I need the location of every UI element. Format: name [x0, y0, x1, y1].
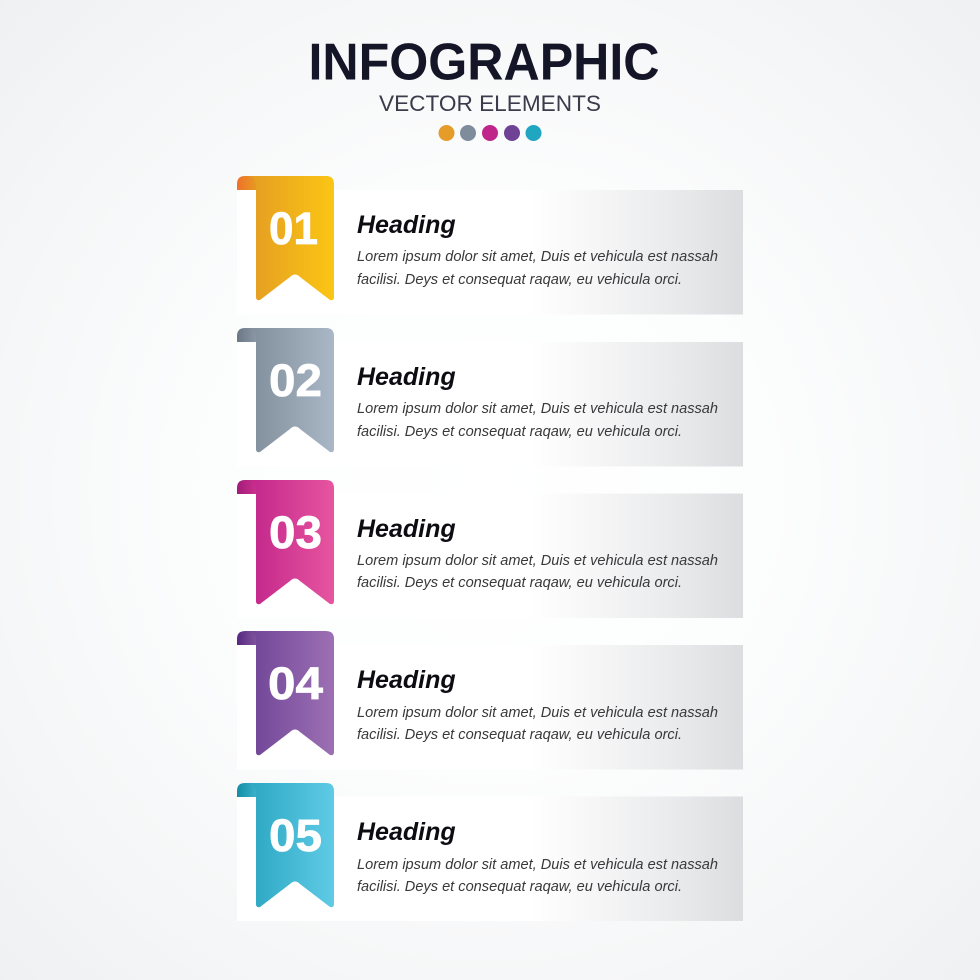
card background [237, 494, 743, 618]
body text: Lorem ipsum dolor sit amet, Duis et vehicula est nassah [357, 553, 718, 569]
subtitle: VECTOR ELEMENTS [379, 91, 601, 116]
body text: Lorem ipsum dolor sit amet, Duis et vehicula est nassah [357, 857, 718, 873]
title: INFOGRAPHIC [308, 34, 660, 92]
ribbon fold [237, 631, 256, 645]
body text: Lorem ipsum dolor sit amet, Duis et vehicula est nassah [357, 705, 718, 721]
ribbon [248, 480, 334, 604]
body text: Lorem ipsum dolor sit amet, Duis et vehicula est nassah [357, 401, 718, 417]
panel: step 03 [237, 480, 743, 618]
ribbon [248, 631, 334, 755]
ribbon [248, 328, 334, 452]
body text line 2: facilisi. Deys et consequat raqaw, eu vehicula orci. [357, 879, 682, 895]
panel: step 04 [237, 631, 743, 770]
heading: Heading [357, 515, 456, 543]
card background [237, 342, 743, 466]
ribbon fold [237, 783, 256, 797]
panel: step 01 [237, 176, 743, 314]
number: 05 [269, 810, 322, 861]
card background [237, 796, 743, 921]
number: 04 [268, 658, 323, 709]
ribbon fold [237, 328, 256, 342]
heading: Heading [357, 211, 456, 239]
body text line 2: facilisi. Deys et consequat raqaw, eu vehicula orci. [357, 727, 682, 743]
ribbon fold [237, 176, 256, 190]
number: 02 [269, 355, 322, 406]
heading: Heading [357, 818, 456, 846]
card background [237, 645, 743, 770]
body text line 2: facilisi. Deys et consequat raqaw, eu vehicula orci. [357, 272, 682, 288]
number: 03 [269, 507, 322, 558]
panel: step 05 [237, 783, 743, 921]
heading: Heading [357, 363, 456, 391]
body text line 2: facilisi. Deys et consequat raqaw, eu vehicula orci. [357, 424, 682, 440]
body text: Lorem ipsum dolor sit amet, Duis et vehicula est nassah [357, 249, 718, 265]
ribbon fold [237, 480, 256, 494]
ribbon [248, 176, 334, 300]
body text line 2: facilisi. Deys et consequat raqaw, eu vehicula orci. [357, 575, 682, 591]
colour dots [438, 125, 542, 141]
ribbon [248, 783, 334, 907]
panel: step 02 [237, 328, 743, 466]
card background [237, 190, 743, 314]
number: 01 [269, 203, 318, 254]
heading: Heading [357, 666, 456, 694]
